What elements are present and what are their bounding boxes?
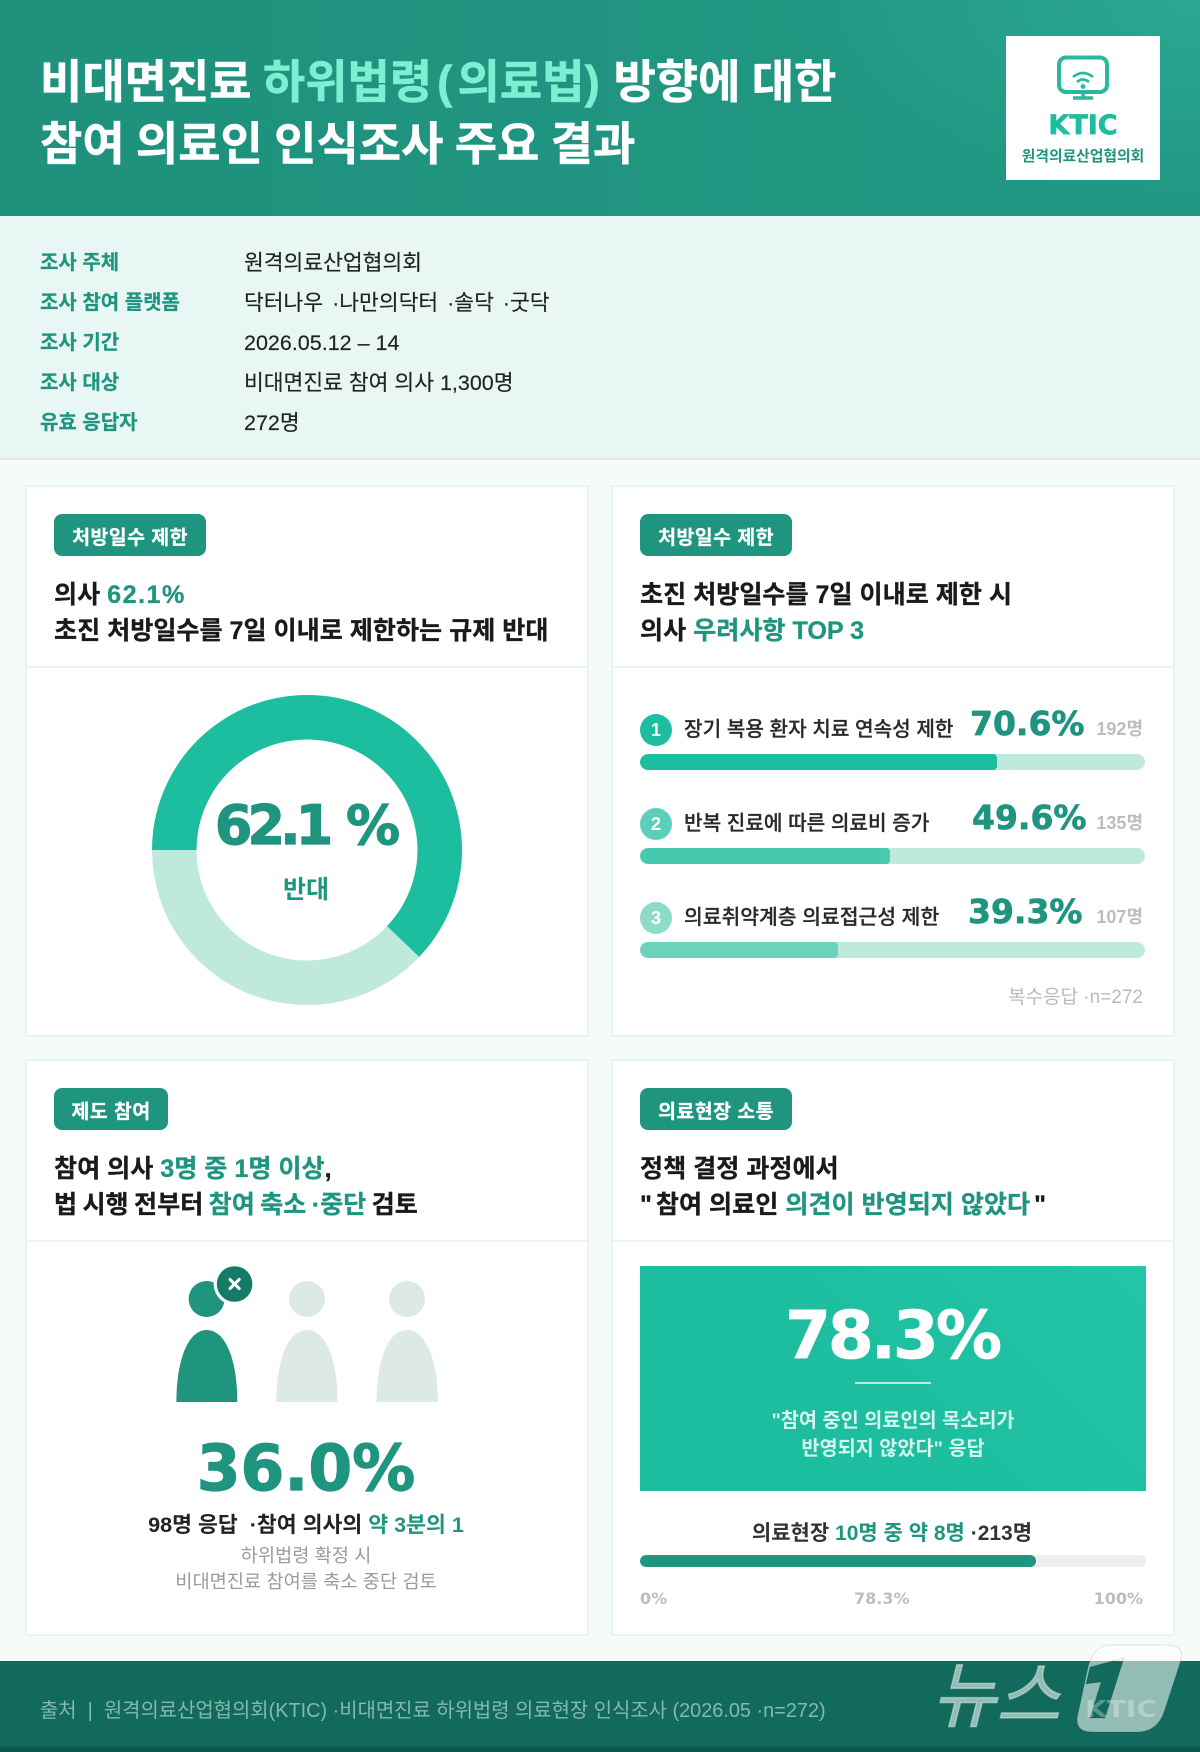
badge: 처방일수 제한 [658,527,774,549]
panel heading: 의사 62.1% [54,581,186,609]
concern 2 [640,798,1145,864]
donut value: 62.1 % [215,794,395,857]
badge [640,1088,792,1130]
rank badge 3 [640,902,672,934]
panel heading: 초진 처방일수를 7일 이내로 제한하는 규제 반대 [54,617,548,645]
logo box [1006,36,1160,180]
watermark: news agency logo: KTIC [1085,1697,1157,1723]
description: 비대면진료 참여를 축소 중단 검토 [175,1570,437,1592]
axis label mid: 78.3% [854,1589,910,1608]
box text: "참여 중인 의료인의 목소리가 [771,1410,1015,1432]
concern bar 1 [640,754,1145,770]
watermark: news agency logo: 뉴스 [928,1657,1076,1737]
badge [54,1088,168,1130]
title [40,56,836,170]
footer [0,1661,1200,1752]
row value: target: 비대면진료 참여 의사 1,300명 [244,371,514,395]
rank badge 2 [640,808,672,840]
panel heading [54,581,548,645]
panel heading [640,1155,1046,1219]
rank badge 3: 3 [651,908,661,928]
row value: period: 2026.05.12 – 14 [244,331,399,355]
concern 3 [640,892,1145,958]
concern count 3: 107명 [1096,907,1143,927]
panel heading: 의사 우려사항 TOP 3 [640,617,864,645]
badge [640,514,792,556]
icon: three people, one crossed [176,1266,438,1402]
highlight box [640,1266,1146,1491]
concern percent 1: 70.6% [970,704,1084,743]
concern bar 3 [640,942,1145,958]
summary line: 98명 응답 ·참여 의사의 약 3분의 1 [148,1512,464,1537]
panel: top 3 concerns [611,485,1175,1037]
icon: monitor with wifi [1057,56,1109,100]
survey overview panel [0,216,1200,460]
box value: 78.3% [785,1297,999,1374]
concern count 1: 192명 [1096,719,1143,739]
rank badge 2: 2 [651,814,661,834]
concern label 2: 반복 진료에 따른 의료비 증가 [684,813,929,835]
note: 복수응답 ·n=272 [1008,987,1143,1008]
axis label 100: 100% [1094,1589,1143,1608]
panel: communication [611,1059,1175,1636]
panel heading [640,581,1012,645]
badge: 제도 참여 [71,1101,151,1123]
panel: 62.1 percent oppose [25,485,589,1037]
panel heading: 법 시행 전부터 참여 축소 ·중단 검토 [54,1191,418,1219]
panel heading: 정책 결정 과정에서 [640,1155,839,1183]
concern bar 2 [640,848,1145,864]
row value: respondents: 272명 [244,411,300,435]
title: 비대면진료 하위법령(의료법) 방향에 대한 [40,56,836,108]
progress bar [640,1555,1146,1567]
row value: survey body: 원격의료산업협의회 [244,251,422,275]
bar caption: 의료현장 10명 중 약 8명 ·213명 [752,1522,1032,1545]
badge: 의료현장 소통 [658,1101,774,1123]
watermark: news agency logo [928,1644,1182,1737]
badge: 처방일수 제한 [72,527,188,549]
box text: 반영되지 않았다" 응답 [801,1438,985,1460]
donut caption: 반대 [283,876,329,904]
row label: target: 조사 대상 [40,372,119,394]
logo organisation name: 원격의료산업협의회 [1022,149,1144,165]
panel heading: 초진 처방일수를 7일 이내로 제한 시 [640,581,1012,609]
concern count 2: 135명 [1096,813,1143,833]
row label: respondents: 유효 응답자 [40,412,138,434]
description [175,1545,437,1592]
row label: period: 조사 기간 [40,332,119,354]
rank badge 1: 1 [651,720,661,740]
concern label 3: 의료취약계층 의료접근성 제한 [684,907,939,929]
donut chart [152,695,462,1005]
rank badge 1 [640,714,672,746]
concern 1 [640,704,1145,770]
concern percent 3: 39.3% [968,892,1082,931]
source text: 출처 | 원격의료산업협의회(KTIC) ·비대면진료 하위법령 의료현장 인식조사 (2026.05 ·n=272) [40,1700,826,1722]
title: 참여 의료인 인식조사 주요 결과 [40,118,635,170]
concern percent 2: 49.6% [972,798,1086,837]
description: 하위법령 확정 시 [241,1545,371,1566]
concern label 1: 장기 복용 환자 치료 연속성 제한 [684,719,954,741]
panel heading [54,1155,418,1219]
panel heading: 참여 의사 3명 중 1명 이상, [54,1155,332,1183]
header banner [0,0,1200,216]
logo wordmark: KTIC [1048,110,1118,141]
axis label 0: 0% [640,1589,667,1608]
row label: platforms: 조사 참여 플랫폼 [40,292,180,314]
panel: participation [25,1059,589,1636]
row value: platforms: 닥터나우 ·나만의닥터 ·솔닥 ·굿닥 [244,291,550,315]
panel heading: "참여 의료인 의견이 반영되지 않았다" [640,1191,1046,1219]
badge [54,514,206,556]
row label: survey body: 조사 주체 [40,252,119,274]
box text [771,1410,1015,1460]
big percentage: 36.0% [197,1432,415,1505]
